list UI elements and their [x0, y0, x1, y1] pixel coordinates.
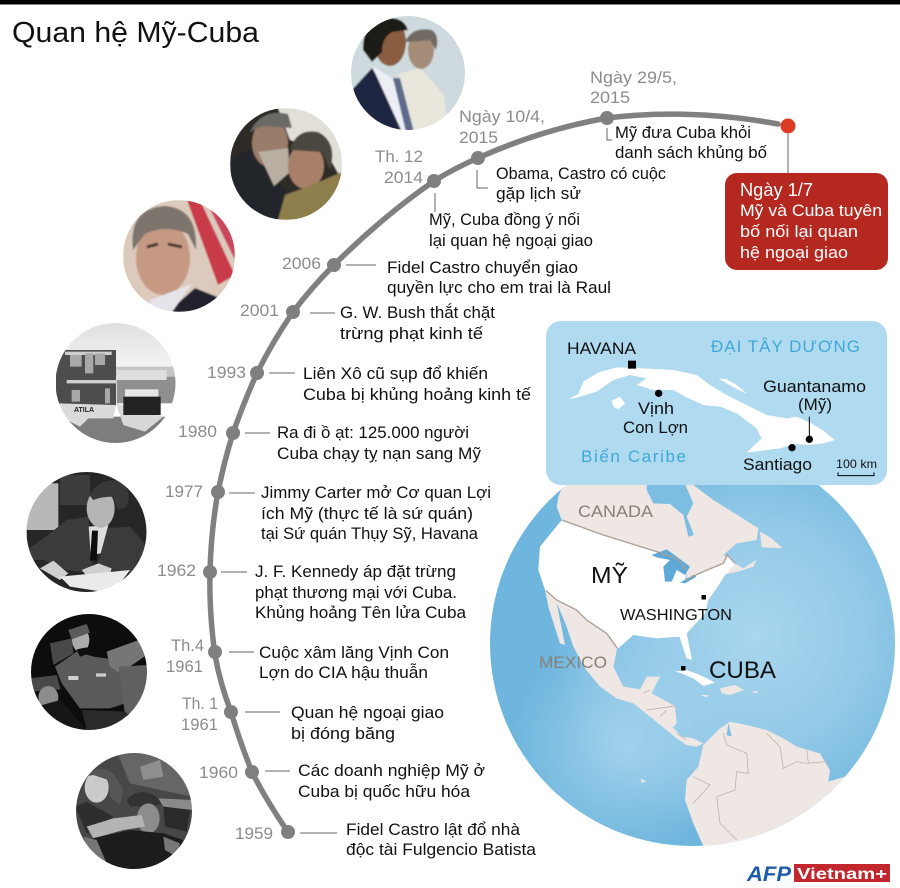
label: Santiago: Santiago [743, 456, 812, 474]
event: April 1961: Cuộc xâm lăng Vịnh Con [259, 644, 449, 662]
event: 1959: Fidel Castro lật đổ nhà [346, 821, 521, 839]
label: scale: 100 km [836, 457, 877, 471]
marker: Washington [702, 595, 706, 600]
date labels: Th.4 [171, 636, 204, 655]
map: Mexico and Central America [545, 590, 703, 747]
map: Canada [557, 480, 758, 582]
marker: Santiago [788, 444, 796, 451]
date labels: 1960 [199, 763, 238, 782]
event: 1959: độc tài Fulgencio Batista [346, 841, 537, 859]
date labels: 1977 [165, 482, 203, 501]
event: April 1961: Lợn do CIA hậu thuẫn [259, 663, 428, 682]
photo: Obama and Raul Castro [350, 15, 466, 135]
marker: Havana [681, 666, 686, 670]
date labels: 2006 [282, 254, 321, 273]
label: Havana: HAVANA [567, 340, 636, 358]
date labels: 1980 [178, 422, 217, 441]
event: December 2014: lại quan hệ ngoại giao [429, 232, 593, 250]
event: 2001: G. W. Bush thắt chặt [340, 303, 495, 322]
top black bar [0, 0, 900, 4]
callout: July 1: Ngày 1/7 [740, 179, 813, 200]
label: My: MỸ [591, 562, 628, 588]
label: Mexico: MEXICO [539, 654, 607, 672]
label: Guantanamo: (Mỹ) [798, 396, 832, 414]
event: December 2014: Mỹ, Cuba đồng ý nối [429, 211, 580, 229]
photo: Fidel Castro with rebels [30, 613, 148, 732]
label: Guantanamo: Guantanamo [763, 378, 866, 396]
event: 2001: trừng phạt kinh tế [340, 325, 483, 343]
date labels [157, 68, 677, 843]
label: Atlantic: ĐẠI TÂY DƯƠNG [711, 337, 860, 356]
callout: July 1: hệ ngoại giao [740, 243, 848, 262]
event: 1962: J. F. Kennedy áp đặt trừng [255, 563, 456, 581]
date labels: 1993 [207, 363, 246, 382]
event: May 2015: danh sách khủng bố [615, 144, 767, 162]
photo: Castro and guerrillas [73, 750, 195, 872]
end dot [780, 118, 796, 134]
event: May 2015: Mỹ đưa Cuba khỏi [615, 124, 751, 142]
island: Isle of Youth [612, 397, 625, 409]
event: April 2015: Obama, Castro có cuộc [496, 165, 666, 183]
keys [718, 378, 747, 393]
label: Washington: WASHINGTON [620, 607, 732, 624]
label: Cuba: CUBA [709, 657, 776, 684]
map: Caribbean islands [675, 670, 715, 686]
event: 1993: Cuba bị khủng hoảng kinh tế [303, 386, 531, 404]
event: 2006: Fidel Castro chuyển giao [387, 259, 578, 277]
date labels: 2014 [384, 168, 423, 187]
logo: Vietnam+: Vietnam+ [797, 866, 887, 883]
label: Bay of Pigs: Con Lợn [623, 419, 688, 437]
date labels: 1962 [157, 561, 196, 580]
logo: Vietnam+ [794, 864, 890, 883]
date labels: Th. 1 [182, 694, 218, 713]
boat name: ATILA [74, 407, 94, 414]
date labels: 2015 [590, 88, 630, 107]
event: April 2015: gặp lịch sử [496, 185, 581, 203]
map: borders [546, 520, 735, 648]
event: 1962: phạt thương mại với Cuba. [255, 584, 457, 602]
logo: AFP: AFP [746, 863, 792, 886]
island: Cuba [568, 367, 835, 453]
event: 2006: quyền lực cho em trai là Raul [387, 279, 611, 297]
date labels: 1961 [166, 657, 203, 676]
callout: July 1: bố nối lại quan [740, 222, 858, 241]
event: January 1961: bị đóng băng [291, 725, 395, 743]
leader lines [221, 128, 788, 833]
timeline arc [203, 111, 796, 839]
event: 1977: tại Sứ quán Thụy Sỹ, Havana [261, 525, 479, 543]
date labels: Ngày 29/5, [590, 68, 677, 87]
map: South America [685, 722, 845, 846]
callout: July 1 [725, 173, 888, 270]
event: 1960: Các doanh nghiệp Mỹ ở [298, 762, 485, 780]
inset map of Cuba [546, 321, 887, 485]
photo: George W. Bush [123, 200, 235, 312]
event: 1980: Ra đi ồ ạt: 125.000 người [277, 424, 469, 442]
label: Canada: CANADA [578, 503, 653, 521]
map: Newfoundland [760, 532, 783, 548]
date labels: 1961 [181, 715, 218, 734]
event: January 1961: Quan hệ ngoại giao [291, 704, 444, 722]
event: 1977: Jimmy Carter mở Cơ quan Lợi [261, 484, 491, 502]
event: 1962: Khủng hoảng Tên lửa Cuba [255, 604, 467, 622]
event: 1980: Cuba chạy tỵ nạn sang Mỹ [277, 445, 482, 463]
date labels: 2015 [459, 128, 498, 147]
timeline dots [203, 111, 614, 839]
event: 1993: Liên Xô cũ sụp đổ khiến [303, 365, 488, 383]
marker: Guantanamo [806, 417, 813, 443]
date labels: Th. 12 [375, 147, 423, 166]
callout: July 1: Mỹ và Cuba tuyên [740, 201, 882, 220]
event: 1960: Cuba bị quốc hữu hóa [298, 783, 471, 801]
photo: Fidel and Raul Castro [230, 108, 342, 220]
world globe map [490, 485, 895, 846]
photo: Mariel boats [56, 323, 176, 443]
label: Bay of Pigs: Vịnh [638, 400, 674, 418]
map: United States [538, 520, 735, 660]
marker: Bay of Pigs [655, 390, 662, 397]
event: 1977: ích Mỹ (thực tế là sứ quán) [261, 505, 473, 523]
date labels: Ngày 10/4, [459, 107, 545, 126]
scale bar [838, 472, 874, 476]
date labels: 1959 [235, 824, 273, 843]
map: Hudson Bay [647, 480, 694, 537]
photo: John F. Kennedy [27, 470, 150, 597]
map: Great Lakes [652, 549, 697, 583]
label: Caribbean: Biển Caribe [581, 447, 686, 466]
title: Quan hệ Mỹ-Cuba [12, 17, 260, 49]
date labels: 2001 [240, 301, 279, 320]
marker: Havana square [628, 361, 636, 369]
